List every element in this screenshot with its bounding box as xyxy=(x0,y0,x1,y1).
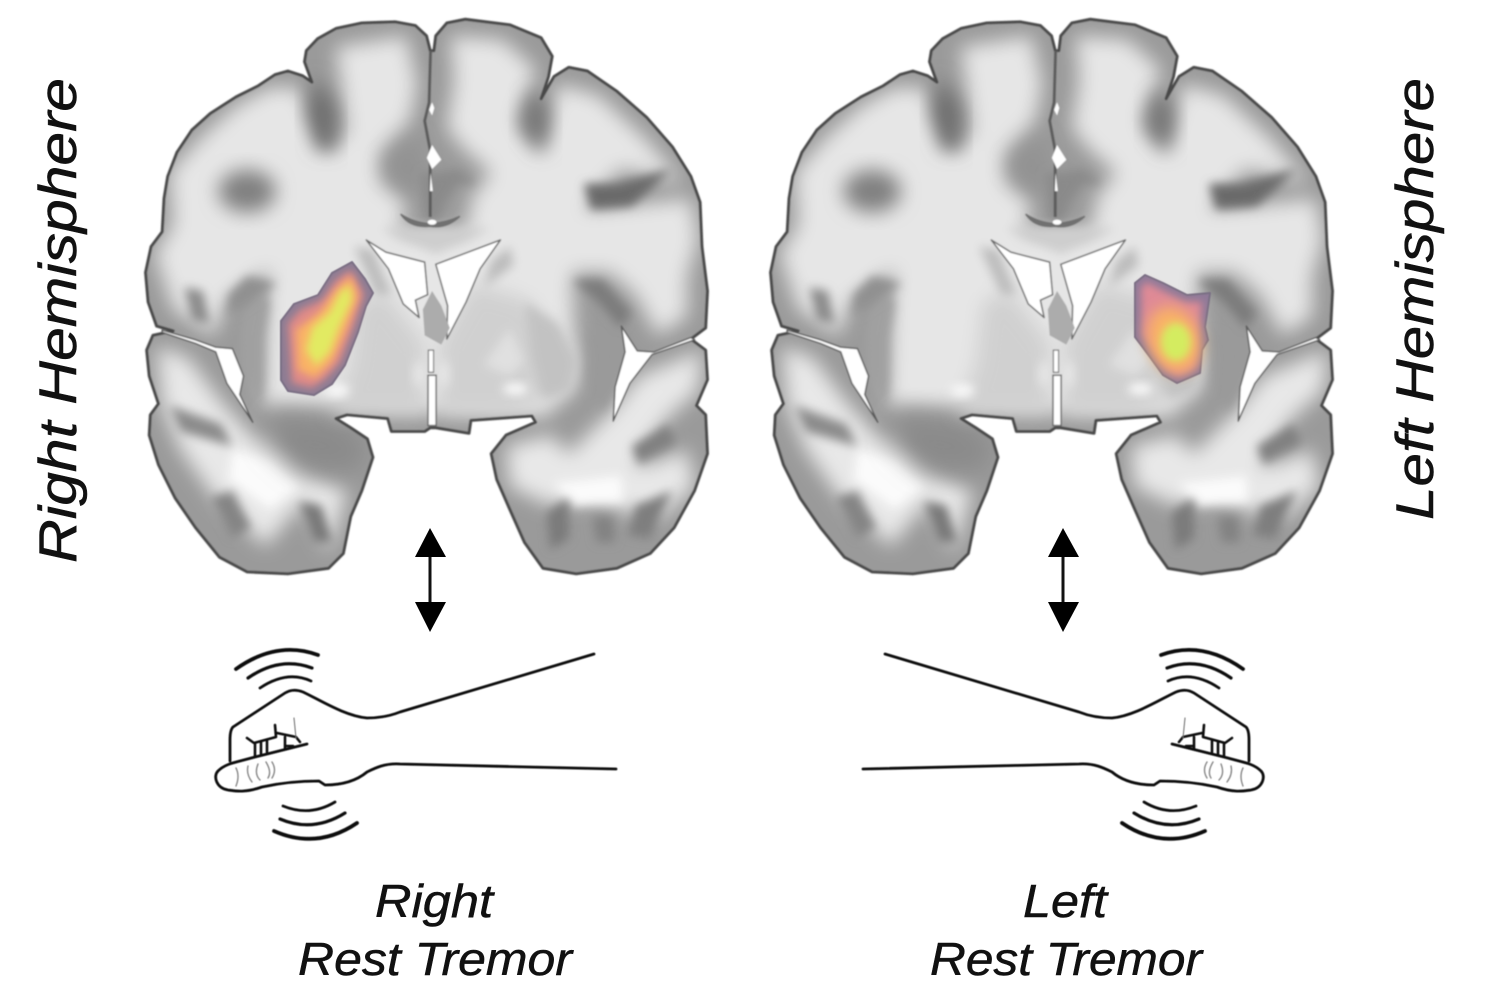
forearm top and hand back xyxy=(230,654,594,761)
heading: Left Hemisphere: Left Hemisphere xyxy=(1386,78,1445,520)
icon: left hand with tremor xyxy=(863,650,1263,839)
activation: left hemisphere focus xyxy=(1135,275,1210,383)
tremor waves bottom xyxy=(283,802,335,811)
label: Right Rest Tremor: Right xyxy=(375,875,495,927)
panel: right hemisphere brain scan xyxy=(146,19,707,574)
tremor waves top xyxy=(236,650,318,669)
label: Left Rest Tremor: Rest Tremor xyxy=(930,933,1204,985)
icon: right hand with tremor xyxy=(216,650,616,839)
panel: left hemisphere brain scan xyxy=(771,19,1332,574)
thumb creases xyxy=(236,762,274,786)
label: Left Rest Tremor: Left xyxy=(1023,875,1109,927)
activation: right hemisphere focus xyxy=(281,262,373,395)
forearm bottom and thumb xyxy=(216,744,616,791)
fingers xyxy=(247,725,300,756)
heading: Right Hemisphere: Right Hemisphere xyxy=(29,78,88,563)
label: Right Rest Tremor: Rest Tremor xyxy=(298,933,574,985)
arrow: right brain to hand xyxy=(415,528,446,632)
label: Right Rest Tremor xyxy=(298,875,574,985)
label: Left Rest Tremor xyxy=(930,875,1204,985)
arrow: left brain to hand xyxy=(1048,528,1079,632)
